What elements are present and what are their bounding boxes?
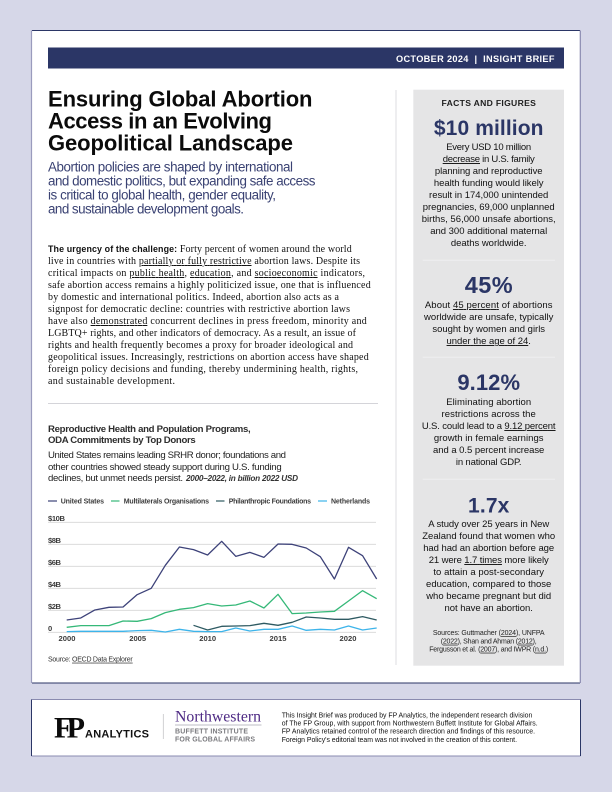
chart heading: [48, 424, 251, 446]
stat: 1.7x: 1.7x: [468, 494, 510, 517]
footer disclosure text: of The FP Group, with support from Northwestern Buffett Institute for Global Affairs.: [282, 720, 538, 728]
text block: urgency of the challenge: LGBTQ+ rights, and other indicators of democracy. As a result, an issue of: [48, 328, 357, 339]
chart legend: [48, 498, 370, 506]
stat: 9.12%: 9.12%: [457, 370, 520, 395]
line chart: ODA commitments: [48, 514, 377, 643]
stat: 45%: 45%: [465, 272, 513, 298]
chart description: 2000–2022, in billion 2022 USD: [185, 474, 298, 483]
x axis labels: 2005: [129, 634, 147, 643]
header band: OCTOBER 2024 | INSIGHT BRIEF: [396, 54, 555, 64]
stat: 1.7x: A study over 25 years in New: [428, 519, 549, 530]
logo: Northwestern Buffett Institute: [175, 709, 262, 744]
stat: 45%: under the age of 24.: [447, 336, 531, 347]
y axis labels: $6B: [48, 558, 62, 567]
title: Geopolitical Landscape: [48, 130, 293, 156]
text block: urgency of the challenge: rights and health frequently becomes a proxy for broader ideological and: [48, 340, 353, 351]
chart description: [48, 450, 298, 484]
stat: 9.12%: [422, 370, 556, 468]
footer disclosure text: FP Analytics retained control of the research direction and findings of this resource.: [282, 729, 535, 736]
x axis labels: 2010: [199, 634, 216, 643]
subtitle: is critical to global health, gender equality,: [48, 188, 276, 203]
footer disclosure text: This Insight Brief was produced by FP Analytics, the independent research division: [282, 712, 532, 719]
subtitle: Abortion policies are shaped by international: [48, 160, 293, 175]
x axis labels: 2000: [59, 634, 75, 643]
stat: 1.7x: [422, 494, 555, 614]
chart description: declines, but unmet needs persist.: [48, 473, 183, 484]
x axis labels: 2020: [340, 634, 356, 643]
text block: urgency of the challenge: safe abortion access remains a highly politicized issue, one that is influenced: [48, 280, 371, 291]
stat: 9.12%: restrictions across the: [442, 409, 536, 420]
y axis labels: $4B: [48, 580, 62, 589]
chart description: United States remains leading SRHR donor; foundations and: [48, 450, 286, 461]
stat: 9.12%: growth in female earnings: [434, 433, 544, 444]
title: [48, 86, 312, 156]
stat: 9.12%: Eliminating abortion: [446, 397, 531, 408]
chart legend: Netherlands: [331, 498, 370, 506]
sidebar sources: (2022), Shan and Ahman (2012),: [441, 639, 537, 646]
x axis labels: [59, 634, 356, 643]
subtitle: and domestic politics, but expanding safe access: [48, 174, 316, 189]
stat: 1.7x: not have an abortion.: [445, 603, 533, 614]
title: Access in an Evolving: [48, 108, 272, 134]
chart source: Source: OECD Data Explorer: [48, 657, 133, 664]
stat: 1.7x: 21 were 1.7 times more likely: [429, 555, 549, 566]
stat: 1.7x: to attain a post-secondary: [433, 567, 544, 578]
footer disclosure text: [282, 712, 538, 744]
text block: urgency of the challenge: and sustainable development.: [48, 376, 175, 387]
stat: $10 million: births, 56,000 unsafe abortions,: [422, 214, 556, 225]
subtitle: [48, 160, 316, 217]
stat: $10 million: deaths worldwide.: [451, 238, 527, 249]
stat: $10 million: planning and reproductive: [435, 166, 543, 177]
series: Philanthropic Foundations: [194, 617, 377, 630]
logo: Northwestern Buffett Institute: BUFFETT INSTITUTE: [175, 729, 248, 736]
text block: urgency of the challenge: live in countries with partially or fully restrictive abortion laws. Despite its: [48, 256, 360, 267]
y axis labels: $8B: [48, 536, 62, 545]
text block: urgency of the challenge: signpost for democratic decline: countries with restrictive abortion laws: [48, 304, 350, 315]
sidebar sources: [429, 630, 548, 654]
stat: $10 million: Every USD 10 million: [446, 142, 531, 153]
stat: 9.12%: in national GDP.: [456, 457, 522, 468]
chart heading: ODA Commitments by Top Donors: [48, 435, 196, 446]
chart legend: Multilaterals Organisations: [124, 498, 209, 506]
logo: FP Analytics: ANALYTICS: [85, 729, 149, 741]
panel: main white page: [32, 30, 580, 683]
y axis labels: $2B: [48, 602, 62, 611]
stat: 45%: [423, 272, 554, 347]
stat: $10 million: result in 174,000 unintended: [429, 190, 548, 201]
text block: urgency of the challenge: by domestic and international politics. Indeed, abortion also acts as a: [48, 292, 340, 303]
chart legend: United States: [61, 498, 104, 506]
y axis labels: $10B: [48, 514, 66, 523]
sidebar heading: FACTS AND FIGURES: [442, 98, 536, 108]
series: Multilaterals Organisations: [67, 591, 377, 627]
stat: 45%: worldwide are unsafe, typically: [423, 312, 554, 323]
stat: 1.7x: education, compared to those: [426, 579, 551, 590]
stat: $10 million: decrease in U.S. family: [443, 154, 535, 165]
text block: urgency of the challenge: foreign policy decisions and funding, thereby undermining health, rights,: [48, 364, 358, 375]
stat: 1.7x: who became pregnant but did: [425, 591, 551, 602]
series: United States: [67, 541, 377, 620]
stat: $10 million: $10 million: [434, 117, 544, 140]
series lines: [67, 541, 377, 632]
y axis labels: [48, 514, 66, 633]
sidebar sources: Fergusson et al. (2007), and IWPR (n.d.): [429, 647, 548, 654]
subtitle: and sustainable development goals.: [48, 202, 244, 217]
stat: $10 million: and 300 additional maternal: [430, 226, 547, 237]
y axis labels: 0: [48, 624, 52, 633]
text block: urgency of the challenge: have also demonstrated concurrent declines in press freedom, minority and: [48, 316, 367, 327]
text block: urgency of the challenge: [48, 244, 371, 387]
chart heading: Reproductive Health and Population Programs,: [48, 424, 251, 435]
sidebar sources: Sources: Guttmacher (2024), UNFPA: [433, 630, 545, 637]
stat: 9.12%: and a 0.5 percent increase: [433, 445, 544, 456]
chart legend: Philanthropic Foundations: [229, 498, 311, 506]
logo: FP Analytics: FP: [54, 712, 85, 745]
stat: 1.7x: Zealand found that women who: [422, 531, 555, 542]
text block: urgency of the challenge: geopolitical issues. Increasingly, restrictions on abortion access have shaped: [48, 352, 369, 363]
logo: Northwestern Buffett Institute: FOR GLOBAL AFFAIRS: [175, 737, 255, 744]
stat: 1.7x: had had an abortion before age: [423, 543, 554, 554]
chart description: other countries showed steady support during U.S. funding: [48, 462, 282, 473]
stat: $10 million: health funding would likely: [434, 178, 544, 189]
stat: 9.12%: U.S. could lead to a 9.12 percent: [422, 421, 556, 432]
logo: FP Analytics: [54, 712, 149, 745]
text block: urgency of the challenge: The urgency of the challenge: Forty percent of women around the world: [48, 244, 352, 255]
stat: 45%: About 45 percent of abortions: [425, 300, 553, 311]
text block: urgency of the challenge: critical impacts on public health, education, and socioeconomic indicators,: [48, 268, 365, 279]
panel: footer: [32, 700, 580, 756]
stat: 45%: sought by women and girls: [432, 324, 545, 335]
stat: $10 million: pregnancies, 69,000 unplanned: [423, 202, 555, 213]
logo: Northwestern Buffett Institute: Northwestern: [175, 709, 261, 726]
header band: [48, 48, 564, 68]
panel: facts and figures: [413, 90, 564, 666]
title: Ensuring Global Abortion: [48, 86, 312, 112]
footer disclosure text: Foreign Policy's editorial team was not involved in the creation of this content.: [282, 737, 517, 744]
series: Netherlands: [67, 626, 377, 632]
x axis labels: 2015: [270, 634, 287, 643]
stat: $10 million: [422, 117, 556, 249]
